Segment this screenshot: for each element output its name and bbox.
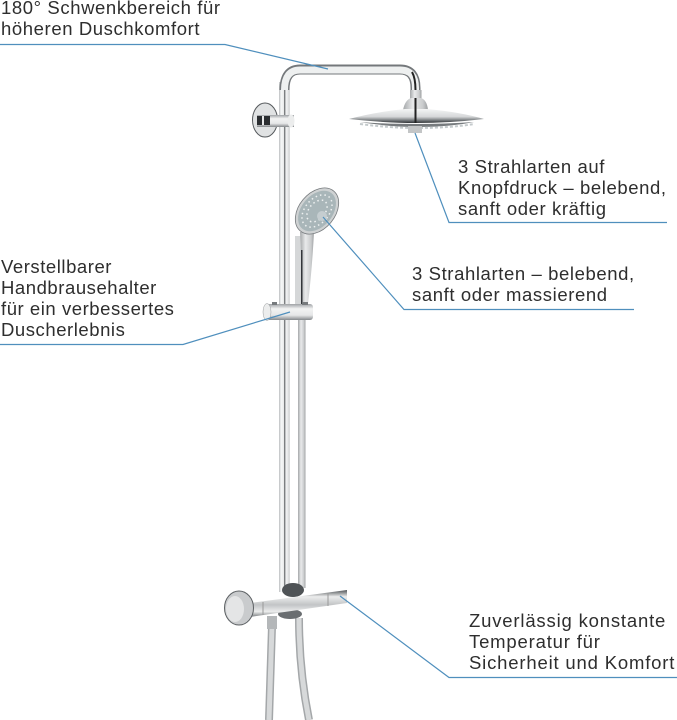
callout: head spray types: 3 Strahlarten auf: [458, 156, 605, 177]
leader line: hand shower spray types: [323, 217, 634, 310]
callout: adjustable holder: für ein verbessertes: [1, 298, 174, 319]
callout: adjustable holder: Duscherlebnis: [1, 319, 125, 340]
hand shower slider: [263, 302, 313, 588]
callout: adjustable holder: Verstellbarer: [1, 256, 112, 277]
callout: swivel range: [1, 0, 221, 39]
wall bracket: [252, 103, 294, 137]
main rail: [279, 82, 290, 592]
leader line: thermostat: [340, 596, 677, 678]
callout: thermostat: Temperatur für: [469, 631, 601, 652]
thermostat: [224, 583, 347, 625]
callout: thermostat: Zuverlässig konstante: [469, 610, 666, 631]
callout: head spray types: sanft oder kräftig: [458, 198, 607, 219]
callout: head spray types: [458, 156, 667, 219]
rain shower head: [349, 90, 484, 133]
hand shower: [286, 180, 348, 304]
hoses: [267, 616, 309, 720]
leader line: swivel range: [0, 44, 328, 69]
leader line: head spray types: [415, 133, 667, 222]
callout: thermostat: Sicherheit und Komfort: [469, 652, 675, 673]
callout: thermostat: [469, 610, 675, 673]
callout: hand shower spray types: [412, 263, 635, 305]
callout: adjustable holder: [1, 256, 174, 340]
leader line: adjustable holder: [0, 312, 290, 344]
callout: adjustable holder: Handbrausehalter: [1, 277, 157, 298]
callout: head spray types: Knopfdruck – belebend,: [458, 177, 667, 198]
callout: hand shower spray types: sanft oder massierend: [412, 284, 608, 305]
callout: swivel range: höheren Duschkomfort: [1, 18, 200, 39]
shower arm: [284, 70, 416, 93]
callout: hand shower spray types: 3 Strahlarten – belebend,: [412, 263, 635, 284]
